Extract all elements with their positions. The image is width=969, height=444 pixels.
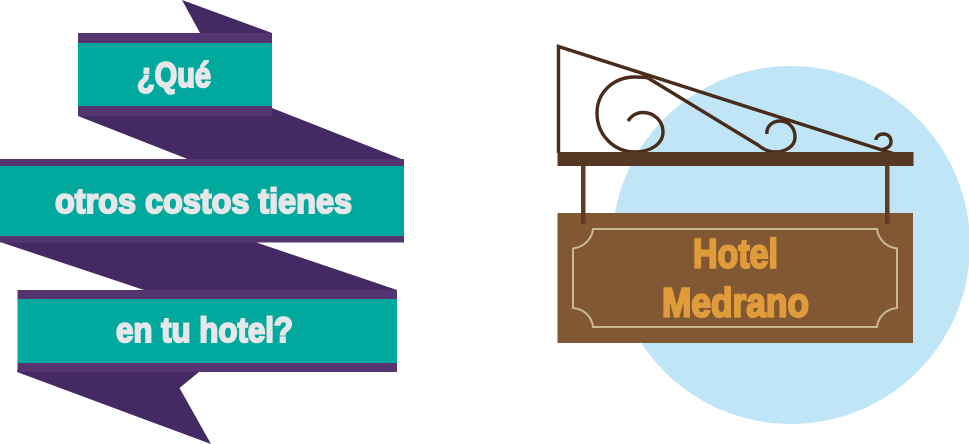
horizontal support bar — [558, 152, 914, 166]
sign board — [558, 213, 913, 343]
light blue circle — [612, 66, 969, 424]
ribbon bottom tail — [17, 370, 211, 444]
sign text: Hotel: Hotel — [693, 230, 778, 276]
band one: Qué — [78, 33, 272, 116]
sign inner border — [573, 229, 897, 327]
ribbon top tail — [182, 0, 272, 33]
ribbon fold one — [78, 108, 404, 160]
right hanging rod — [885, 166, 890, 224]
ribbon banner — [0, 0, 404, 444]
ribbon fold two — [0, 240, 397, 290]
heading line two: otros costos tienes — [55, 182, 352, 221]
band two: otros costos tienes — [0, 159, 404, 242]
wrought iron bracket — [558, 46, 893, 154]
hanging hotel sign — [558, 46, 914, 343]
heading word one: ¿Qué — [137, 56, 211, 95]
band three: en tu hotel — [18, 290, 397, 372]
left hanging rod — [581, 166, 586, 224]
heading line three: en tu hotel? — [116, 311, 293, 350]
sign text: Medrano: Medrano — [662, 280, 809, 326]
